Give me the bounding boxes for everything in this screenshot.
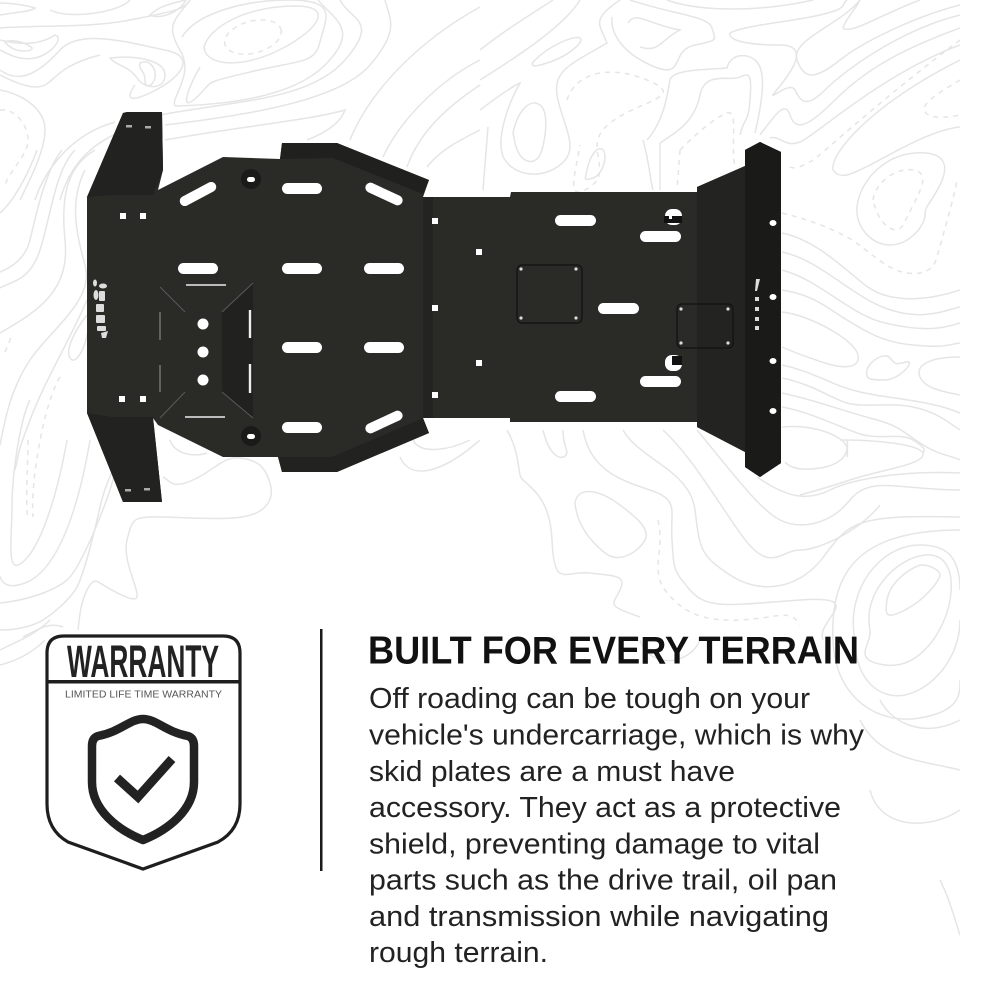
body text: parts such as the drive trail, oil pan bbox=[369, 864, 837, 896]
right end guard bbox=[697, 142, 781, 477]
plate body silhouette bbox=[87, 112, 781, 502]
body text: shield, preventing damage to vital bbox=[369, 828, 820, 860]
body text: Off roading can be tough on your bbox=[369, 683, 811, 715]
warranty badge bbox=[47, 636, 240, 869]
icon: shield bbox=[92, 719, 194, 840]
inspection panel outlines bbox=[517, 265, 733, 348]
body text bbox=[369, 683, 865, 969]
badge outline bbox=[47, 636, 240, 869]
right logo mark bbox=[755, 279, 760, 330]
upper guard flange bbox=[280, 143, 429, 194]
slots bbox=[178, 180, 681, 435]
body text: accessory. They act as a protective bbox=[369, 792, 841, 824]
right guard holes bbox=[770, 220, 776, 414]
left logo mark bbox=[93, 280, 108, 338]
wing tab holes bbox=[125, 125, 151, 492]
icon: check mark bbox=[117, 759, 172, 797]
badge divider bbox=[48, 680, 239, 684]
skid plate bbox=[87, 112, 781, 502]
body text: skid plates are a must have bbox=[369, 756, 735, 788]
bolts bbox=[241, 169, 261, 446]
body text: and transmission while navigating bbox=[369, 901, 829, 933]
rear cut-outs bbox=[664, 209, 682, 371]
vertical divider bbox=[320, 629, 322, 871]
square mounting holes bbox=[119, 213, 482, 402]
mid plate step bbox=[423, 197, 433, 418]
lower guard flange bbox=[278, 418, 429, 472]
body text: rough terrain. bbox=[369, 937, 548, 969]
left bumper wing shading bbox=[87, 112, 163, 502]
centre recess panel bbox=[160, 283, 253, 418]
badge title: WARRANTY bbox=[67, 636, 219, 687]
badge subtitle: LIMITED LIFE TIME WARRANTY bbox=[65, 688, 222, 700]
body text: vehicle's undercarriage, which is why bbox=[369, 720, 865, 752]
heading: BUILT FOR EVERY TERRAIN bbox=[368, 630, 859, 672]
